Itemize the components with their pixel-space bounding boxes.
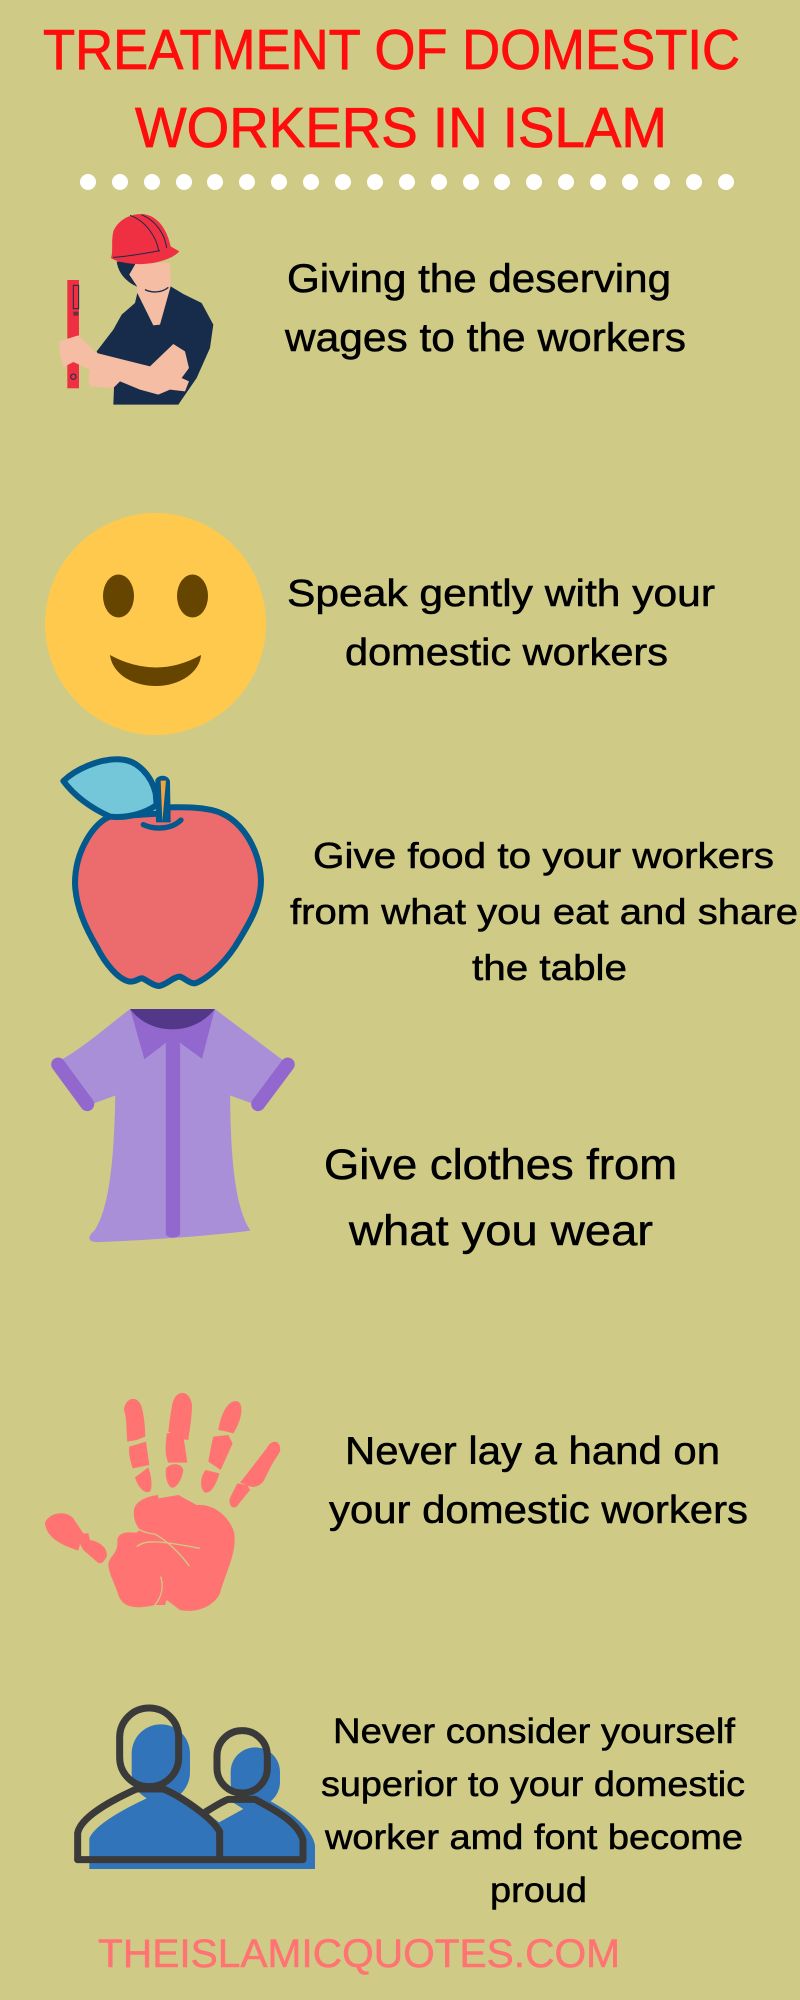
dotted divider [80,174,734,190]
text: wages: Giving the deserving [287,257,671,301]
apple leaf [63,759,157,817]
finger 3 [201,1401,241,1493]
stem base [143,820,181,828]
thumb [45,1513,107,1563]
text: clothes: what you wear [348,1207,653,1255]
text: never lay a hand: Never lay a hand on [345,1430,720,1473]
text: never consider yourself superior: proud [490,1871,587,1910]
placket [166,1041,180,1238]
face and neck [129,263,171,325]
hard hat [111,214,179,264]
icon: red handprint [45,1393,280,1611]
text: wages [284,257,686,360]
text: never lay a hand [329,1430,748,1532]
title: WORKERS IN ISLAM [135,96,667,160]
dark outlines [78,1708,303,1860]
title: TREATMENT OF DOMESTIC [43,18,740,82]
collar [130,1009,215,1059]
text: food [290,835,798,988]
text: speak gently: Speak gently with your [287,573,715,615]
icon: shirt [58,1009,288,1242]
text: never consider yourself superior: worker amd font become [324,1818,743,1857]
spirit level [67,280,79,388]
finger 2 [166,1393,192,1488]
icon: apple [63,759,261,986]
shirt body [59,1009,283,1242]
text: never consider yourself superior [321,1712,745,1910]
palm creases [131,1525,200,1605]
text: clothes: Give clothes from [324,1141,677,1189]
jaw line [145,287,168,292]
icon: smiley face [45,513,266,735]
finger 4 [229,1442,280,1508]
text: never lay a hand: your domestic workers [329,1489,748,1532]
crossed arms [59,335,189,395]
title [43,18,740,160]
sleeve cuffs [58,1064,288,1104]
hair [117,261,137,287]
text: speak gently [287,573,715,674]
text: clothes [324,1141,677,1255]
finger 1 [124,1399,152,1492]
footer: website: THEISLAMICQUOTES.COM [98,1932,620,1976]
text: never consider yourself superior: Never consider yourself [333,1712,735,1751]
hat ridges [113,215,167,257]
icon: construction worker [59,214,213,405]
text: food: from what you eat and share [290,891,798,932]
apple body [75,807,261,986]
stem highlight [161,781,166,822]
text: food: the table [472,947,627,988]
text: never consider yourself superior: superior to your domestic [321,1765,745,1804]
icon: two people [78,1708,315,1869]
neck [130,1009,215,1029]
text: wages: wages to the workers [284,316,686,360]
blue fill shapes [89,1724,315,1869]
palm [108,1495,235,1611]
shirt [97,286,213,405]
text: food: Give food to your workers [313,835,774,876]
apple stem [156,776,170,822]
text: speak gently: domestic workers [345,632,668,674]
